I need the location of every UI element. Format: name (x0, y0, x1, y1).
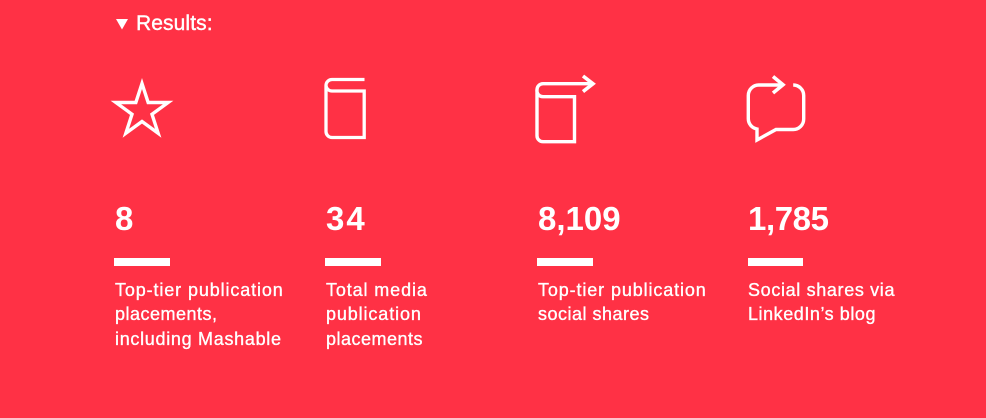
description: social shares (538, 304, 650, 324)
bar (537, 258, 593, 266)
number: 8,109: 8,109 (538, 200, 621, 237)
description (748, 280, 895, 324)
number: 34: 34 (326, 200, 367, 237)
bar (325, 258, 381, 266)
icon: speech bubble with share arrow (746, 75, 806, 143)
bar (748, 258, 803, 266)
heading: results: Results: (136, 12, 213, 35)
icon: book with share arrow (535, 74, 596, 144)
description: Social shares via (748, 280, 895, 300)
description: including Mashable (115, 329, 282, 349)
description: placements, (115, 304, 218, 324)
description (538, 280, 707, 324)
description: publication (326, 304, 422, 324)
bar (114, 258, 170, 266)
number: 8: 8 (115, 200, 133, 237)
description (115, 280, 284, 350)
icon: down triangle (116, 19, 128, 30)
number: 1,785: 1,785 (748, 200, 829, 237)
description: LinkedIn’s blog (748, 304, 876, 324)
description: Top-tier publication (538, 280, 707, 300)
icon: book (324, 78, 366, 140)
description: Top-tier publication (115, 280, 284, 300)
description (326, 280, 428, 350)
description: Total media (326, 280, 428, 300)
icon: star (110, 78, 174, 138)
description: placements (326, 329, 423, 349)
